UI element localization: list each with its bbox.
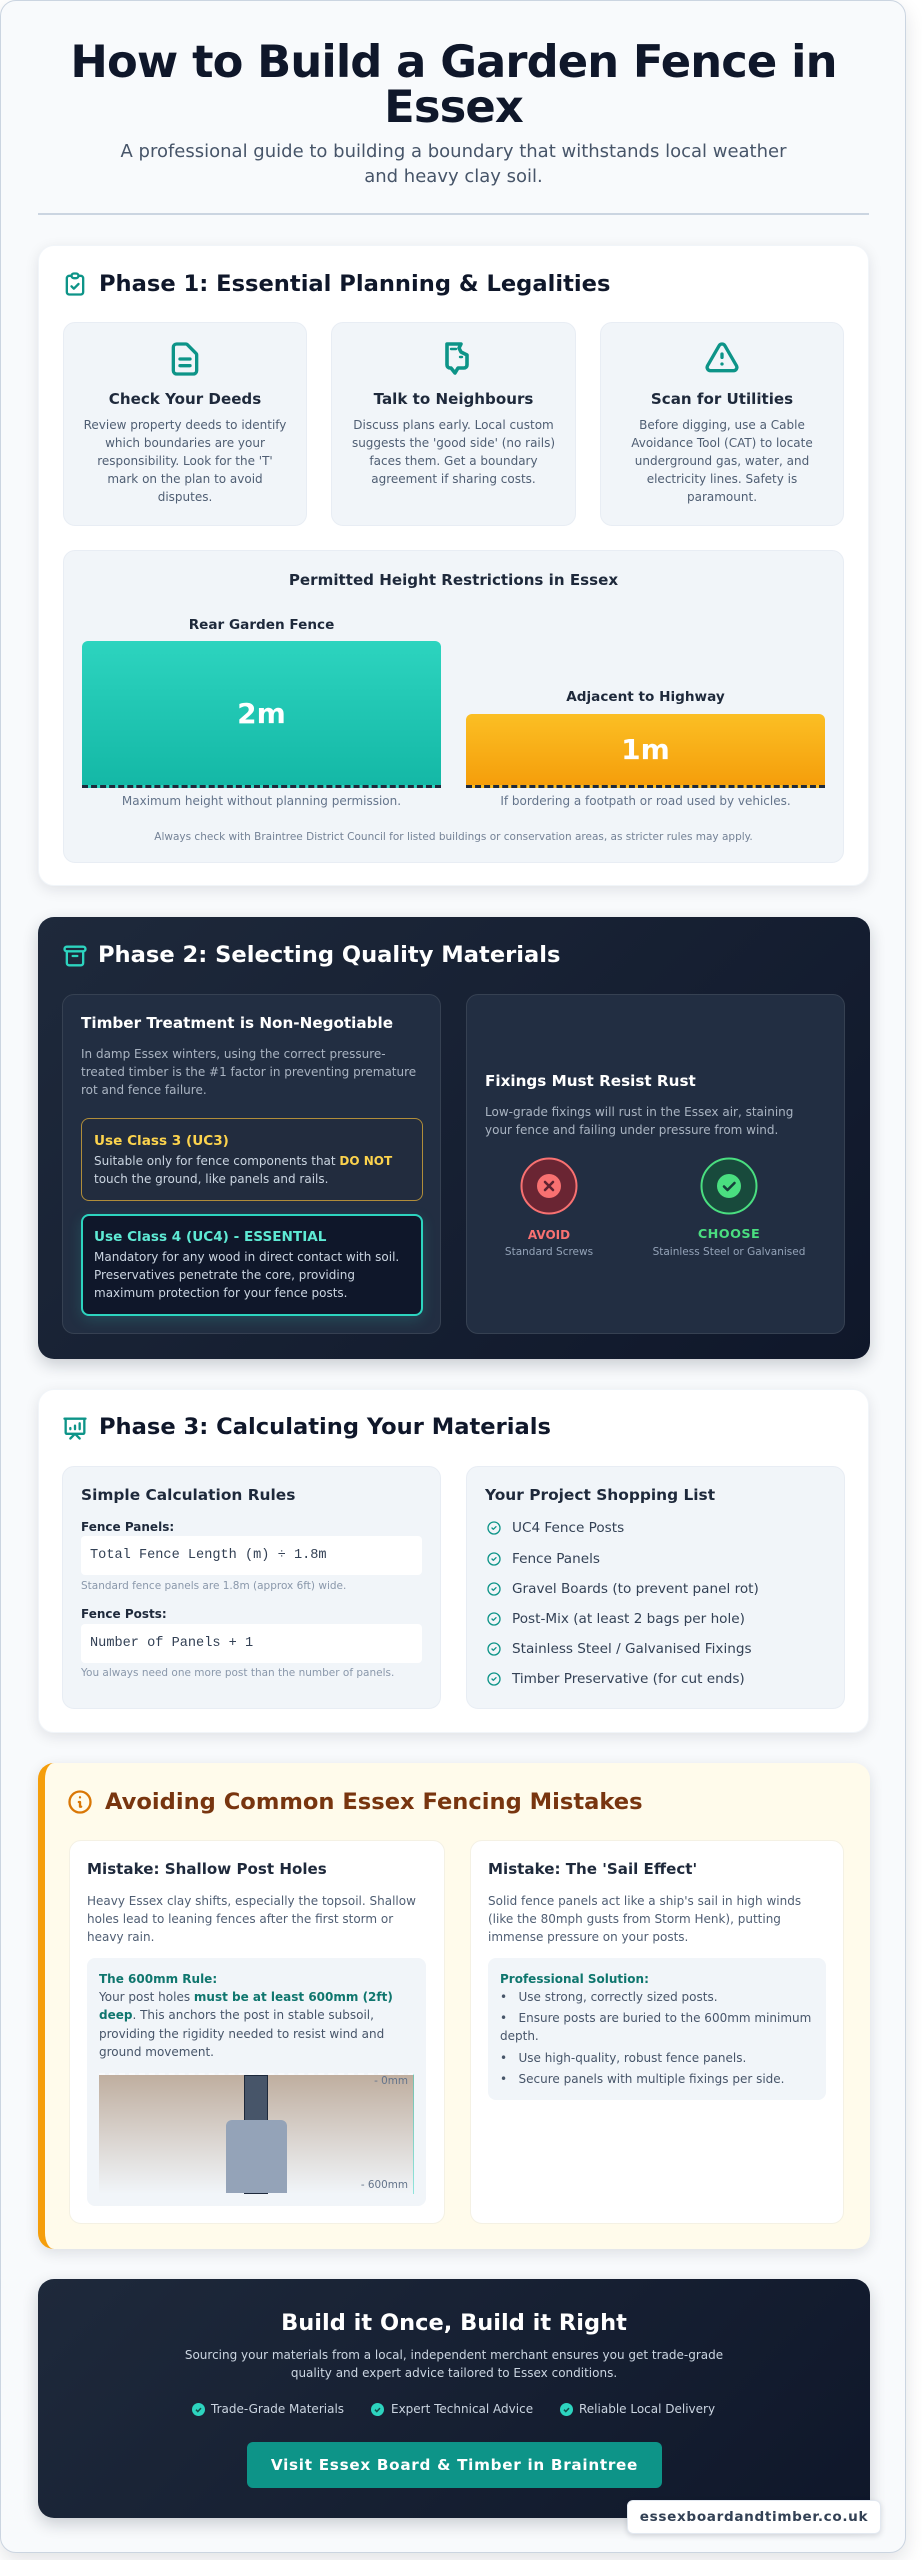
avoid text: Standard Screws (505, 1246, 593, 1258)
list icon (487, 1642, 501, 1656)
title (70, 35, 837, 133)
callout text: maximum protection for your fence posts. (94, 1286, 348, 1300)
card text: holes lead to leaning fences after the first storm or (87, 1912, 393, 1926)
website badge: essexboardandtimber.co.uk (640, 2509, 868, 2525)
card title: Simple Calculation Rules (81, 1486, 295, 1504)
card text: electricity lines. Safety is (647, 472, 797, 486)
phase 1 heading: Phase 1: Essential Planning & Legalities (99, 271, 610, 297)
card: sail effect (470, 1840, 844, 2224)
callout: use class 3 (81, 1118, 423, 1201)
card text (631, 418, 813, 504)
bar: rear garden fence (82, 617, 441, 808)
card text (87, 1894, 416, 1944)
bar caption: If bordering a footpath or road used by vehicles. (500, 794, 791, 808)
icon: choose circle (700, 1158, 758, 1214)
card: fixings must resist rust (466, 994, 845, 1334)
chart note: Always check with Braintree District Council for listed buildings or conservation areas, as stricter rules may apply. (154, 831, 753, 843)
rule text: ground movement. (99, 2045, 214, 2059)
card: shallow post holes (69, 1840, 445, 2224)
card text: agreement if sharing costs. (371, 472, 536, 486)
icon: speech bubble (445, 342, 469, 375)
card title: Check Your Deeds (109, 390, 261, 408)
icon: document (172, 342, 198, 376)
list item: Gravel Boards (to prevent panel rot) (512, 1580, 759, 1596)
website badge (627, 2500, 881, 2534)
card text: Review property deeds to identify (84, 418, 286, 432)
benefit: reliable local delivery (560, 2399, 730, 2419)
title: How to Build a Garden Fence in (70, 35, 837, 88)
list icon (487, 1612, 501, 1626)
cta button (247, 2442, 662, 2488)
card title: Mistake: Shallow Post Holes (87, 1860, 327, 1878)
solution item (500, 2011, 811, 2043)
list icon (487, 1552, 501, 1566)
card text: responsibility. Look for the 'T' (97, 454, 273, 468)
choose label: CHOOSE (698, 1227, 760, 1242)
solution item: • Use high-quality, robust fence panels. (500, 2050, 746, 2064)
icon: check (192, 2403, 205, 2416)
benefit label: Trade-Grade Materials (211, 2402, 344, 2416)
callout title: Use Class 4 (UC4) - ESSENTIAL (94, 1229, 326, 1245)
icon: clipboard check (66, 272, 84, 296)
bar label: Rear Garden Fence (189, 617, 334, 633)
rule formula: Number of Panels + 1 (90, 1636, 253, 1651)
bar label: Adjacent to Highway (566, 689, 725, 705)
rule text: providing the rigidity needed to resist wind and (99, 2027, 384, 2041)
card text: treated timber is the #1 factor in preventing premature (81, 1065, 416, 1079)
card text: faces them. Get a boundary (369, 454, 538, 468)
cta text: Sourcing your materials from a local, independent merchant ensures you get trade-grade (185, 2348, 723, 2362)
bar 2m: 2m (237, 697, 286, 730)
title: Essex (384, 80, 523, 133)
card text: Low-grade fixings will rust in the Essex air, staining (485, 1105, 793, 1119)
bar 1m: 1m (621, 733, 670, 766)
panel: common mistakes (38, 1763, 870, 2249)
card: scan for utilities (600, 322, 844, 526)
panel: height restrictions chart (63, 550, 844, 863)
phase 2 heading: Phase 2: Selecting Quality Materials (98, 942, 560, 968)
rule text (99, 1972, 393, 2059)
list icon (487, 1672, 501, 1686)
subtitle: A professional guide to building a boundary that withstands local weather (120, 141, 787, 162)
concrete footing (226, 2120, 287, 2193)
avoid label: AVOID (528, 1228, 570, 1242)
rule box: 600mm (87, 1958, 426, 2206)
shopping list (487, 1520, 759, 1687)
list item: Fence Panels (512, 1550, 600, 1566)
card text: mark on the plan to avoid (107, 472, 263, 486)
cta heading: Build it Once, Build it Right (281, 2310, 627, 2336)
rule formula: Total Fence Length (m) ÷ 1.8m (90, 1548, 327, 1563)
rule formula (81, 1536, 422, 1575)
icon: warning triangle (705, 342, 739, 372)
mistakes heading: Avoiding Common Essex Fencing Mistakes (105, 1789, 643, 1815)
cta button: Visit Essex Board & Timber in Braintree (271, 2456, 638, 2474)
fence panels rule (81, 1520, 422, 1592)
card text: (like the 80mph gusts from Storm Henk), putting (488, 1912, 781, 1926)
callout text: Mandatory for any wood in direct contact with soil. (94, 1250, 399, 1264)
card text (488, 1894, 801, 1944)
list item: Timber Preservative (for cut ends) (512, 1671, 745, 1687)
callout text (94, 1154, 392, 1186)
icon: archive box (63, 946, 87, 966)
list icon (487, 1521, 501, 1535)
card: timber treatment (62, 994, 441, 1334)
benefit: expert technical advice (371, 2402, 533, 2416)
card text: rot and fence failure. (81, 1083, 207, 1097)
icon: avoid circle (520, 1158, 578, 1214)
card: check your deeds (63, 322, 307, 526)
callout: use class 4 (81, 1214, 423, 1316)
card text: In damp Essex winters, using the correct pressure- (81, 1047, 386, 1061)
card text: heavy rain. (87, 1930, 154, 1944)
rule note: You always need one more post than the number of panels. (81, 1667, 394, 1679)
callout text (94, 1250, 399, 1300)
icon: info circle (68, 1790, 92, 1814)
solution item: depth. (500, 2029, 539, 2043)
card title: Fixings Must Resist Rust (485, 1072, 696, 1090)
card text: suggests the 'good side' (no rails) (352, 436, 555, 450)
depth label 0mm: - 0mm (374, 2075, 408, 2087)
card text: Discuss plans early. Local custom (353, 418, 554, 432)
callout text: touch the ground, like panels and rails. (94, 1172, 328, 1186)
bar 1m (466, 714, 825, 788)
card: talk to neighbours (331, 322, 576, 526)
post depth diagram (99, 2073, 414, 2194)
list item: Stainless Steel / Galvanised Fixings (512, 1641, 752, 1657)
choose indicator (653, 1158, 805, 1258)
phase 3 heading: Phase 3: Calculating Your Materials (99, 1414, 551, 1440)
card: calculation rules (62, 1466, 441, 1709)
fence posts rule (81, 1607, 422, 1679)
rule text: Your post holes must be at least 600mm (2ft) (99, 1990, 393, 2004)
icon: presentation chart (63, 1418, 87, 1440)
panel: phase 3 calculating materials (38, 1389, 869, 1733)
cta text: quality and expert advice tailored to Essex conditions. (291, 2366, 617, 2380)
header divider (38, 213, 869, 215)
rule text: deep. This anchors the post in stable subsoil, (99, 2008, 374, 2022)
callout title: Use Class 3 (UC3) (94, 1133, 229, 1149)
card title: Your Project Shopping List (485, 1486, 715, 1504)
card text: Solid fence panels act like a ship's sail in high winds (488, 1894, 801, 1908)
rule text: The 600mm Rule: (99, 1972, 217, 1986)
callout text: Preservatives penetrate the core, providing (94, 1268, 355, 1282)
solution item: • Ensure posts are buried to the 600mm minimum (500, 2011, 811, 2025)
card text (485, 1105, 793, 1137)
card text: paramount. (687, 490, 757, 504)
benefit label: Expert Technical Advice (391, 2402, 533, 2416)
card title: Mistake: The 'Sail Effect' (488, 1860, 697, 1878)
list item: UC4 Fence Posts (512, 1520, 624, 1536)
card text (84, 418, 286, 504)
card text: immense pressure on your posts. (488, 1930, 688, 1944)
chart title: Permitted Height Restrictions in Essex (289, 571, 618, 589)
card text: which boundaries are your (105, 436, 265, 450)
list item: Post-Mix (at least 2 bags per hole) (512, 1611, 745, 1627)
bar: adjacent to highway (466, 689, 825, 808)
card title: Timber Treatment is Non-Negotiable (81, 1014, 393, 1032)
panel: call to action (38, 2279, 870, 2518)
list icon (487, 1582, 501, 1596)
avoid indicator (505, 1158, 593, 1258)
card text (352, 418, 555, 486)
solution box (488, 1958, 826, 2100)
solution title: Professional Solution: (500, 1972, 649, 1986)
solution item: • Use strong, correctly sized posts. (500, 1990, 718, 2004)
rule note: Standard fence panels are 1.8m (approx 6ft) wide. (81, 1580, 346, 1592)
rule label: Fence Posts: (81, 1607, 167, 1621)
solution item: • Secure panels with multiple fixings per side. (500, 2072, 784, 2086)
card: shopping list (466, 1466, 845, 1709)
card text: your fence and failing under pressure from wind. (485, 1123, 778, 1137)
fence post (244, 2075, 268, 2194)
cta text (185, 2348, 723, 2380)
benefit label: Reliable Local Delivery (579, 2402, 715, 2416)
card text: Avoidance Tool (CAT) to locate (631, 436, 813, 450)
icon: check (560, 2403, 573, 2416)
rule label: Fence Panels: (81, 1520, 174, 1534)
card title: Talk to Neighbours (374, 390, 533, 408)
benefit: trade-grade materials (192, 2402, 344, 2416)
depth label 600mm: - 600mm (361, 2179, 408, 2191)
panel: phase 1 planning and legalities (38, 245, 869, 886)
card text: underground gas, water, and (635, 454, 809, 468)
card text (81, 1047, 416, 1097)
callout text: Suitable only for fence components that DO NOT (94, 1154, 392, 1168)
choose text: Stainless Steel or Galvanised (653, 1246, 805, 1258)
subtitle (120, 141, 787, 187)
rule formula (81, 1624, 422, 1663)
bar 2m (82, 641, 441, 788)
panel: phase 2 selecting materials (38, 917, 870, 1359)
subtitle: and heavy clay soil. (364, 166, 543, 187)
card title: Scan for Utilities (651, 390, 793, 408)
card text: Before digging, use a Cable (639, 418, 805, 432)
card text: Heavy Essex clay shifts, especially the topsoil. Shallow (87, 1894, 416, 1908)
bar caption: Maximum height without planning permission. (122, 794, 401, 808)
card text: disputes. (158, 490, 212, 504)
icon: check (371, 2403, 384, 2416)
